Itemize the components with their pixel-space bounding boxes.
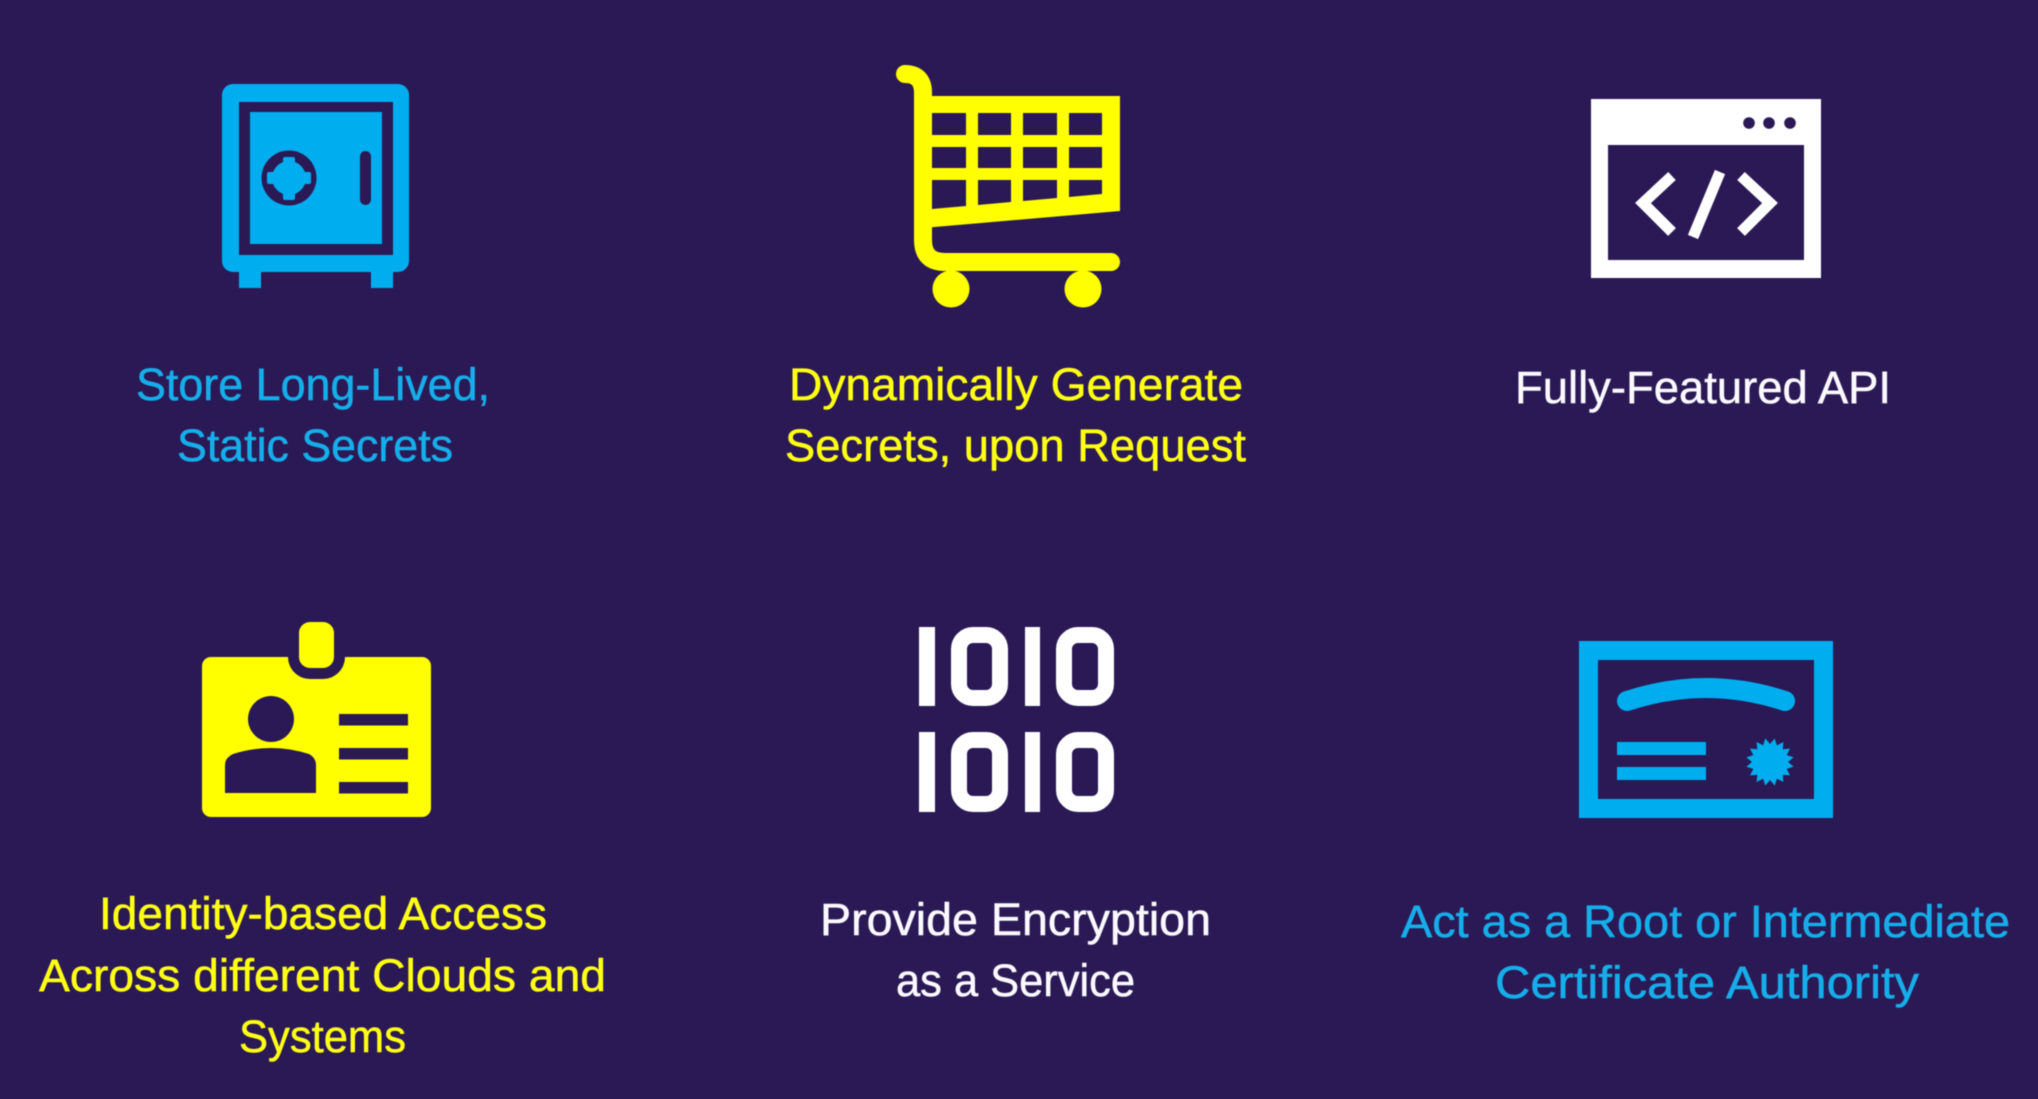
heading: identity-based access: Across different Clouds and [39,950,606,1001]
heading: store long-lived static secrets [136,359,490,471]
panel: store long-lived static secrets [136,84,490,471]
heading: root or intermediate CA: Certificate Authority [1495,957,1920,1008]
heading: store long-lived static secrets: Static Secrets [177,420,453,471]
heading: encryption as a service: as a Service [896,955,1135,1006]
heading: identity-based access: Identity-based Access [99,888,547,939]
panel: root or intermediate CA [1401,650,2010,1008]
heading: root or intermediate CA [1401,896,2010,1008]
panel: dynamically generate secrets [785,74,1246,471]
heading: dynamically generate secrets [785,359,1246,471]
heading: root or intermediate CA: Act as a Root or Intermediate [1401,896,2010,947]
heading: encryption as a service [820,894,1211,1006]
icon: shopping cart [905,74,1120,308]
icon: binary digits [919,627,1106,812]
heading: fully-featured API: Fully-Featured API [1515,362,1891,413]
heading: identity-based access: Systems [239,1011,406,1062]
panel: encryption as a service [820,627,1211,1006]
heading: dynamically generate secrets: Secrets, upon Request [785,420,1246,471]
icon: safe [222,84,409,288]
icon: certificate [1588,650,1824,808]
icon: code window [1591,99,1821,278]
panel: fully-featured API [1515,99,1891,413]
heading: encryption as a service: Provide Encryption [820,894,1211,945]
icon: ID badge [202,622,431,817]
heading: store long-lived static secrets: Store Long-Lived, [136,359,490,410]
heading: dynamically generate secrets: Dynamically Generate [789,359,1243,410]
panel: identity-based access [39,622,606,1062]
heading: identity-based access [39,888,606,1062]
